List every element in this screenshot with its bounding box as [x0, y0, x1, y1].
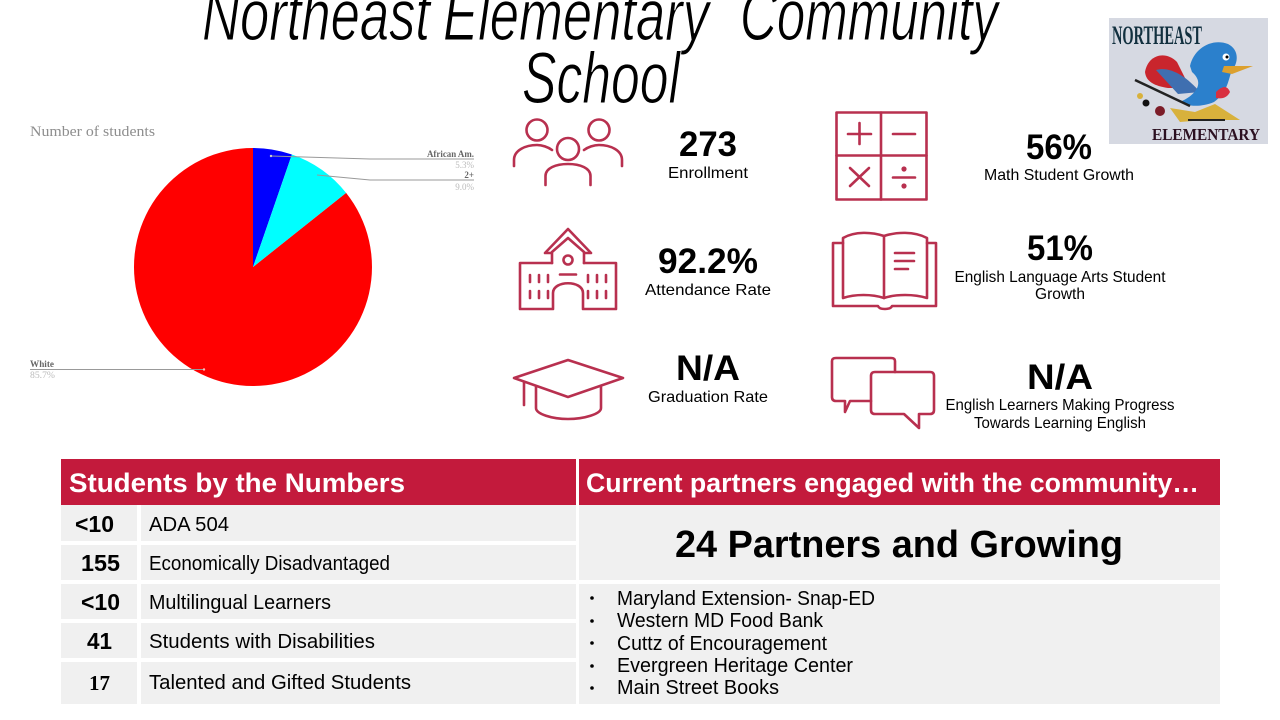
label: African Am. — [270, 149, 474, 170]
stat: English learners making progress: English Learners Making Progress — [946, 397, 1174, 414]
icon: school building — [520, 229, 616, 309]
pie slice: African Am. — [253, 148, 292, 267]
logo: Northeast Elementary roadrunner — [1109, 18, 1268, 144]
row: students with disabilities: 41 — [87, 628, 112, 654]
stat: attendance rate: Attendance Rate — [645, 282, 771, 299]
list: partners: Cuttz of Encouragement — [617, 633, 827, 655]
stat: enrollment: Enrollment — [668, 165, 749, 182]
panel: students by the numbers — [61, 459, 576, 704]
label: White — [30, 359, 205, 380]
stat: enrollment — [668, 125, 749, 182]
stat: attendance rate: 92.2% — [658, 242, 758, 281]
row: talented and gifted students: Talented and Gifted Students — [149, 672, 411, 694]
stat: enrollment: 273 — [679, 125, 737, 164]
row: ADA 504 — [61, 505, 576, 541]
stat: English language arts student growth — [954, 229, 1166, 303]
label: White: 85.7% — [30, 370, 56, 380]
heading: current partners — [579, 459, 1220, 505]
icon: graduation cap — [514, 360, 623, 419]
stat: English learners making progress — [946, 358, 1174, 432]
stat: English learners making progress: N/A — [1027, 358, 1093, 397]
stat: math student growth: 56% — [1026, 128, 1092, 167]
stat: graduation rate — [648, 349, 768, 406]
chart title: Number of students — [30, 124, 155, 140]
heading: current partners: Current partners engaged with the community… — [586, 468, 1199, 498]
list: partners: Western MD Food Bank — [617, 610, 824, 632]
heading: students by the numbers — [61, 459, 576, 505]
row: talented and gifted students — [61, 662, 576, 704]
stat: English language arts student growth: English Language Arts Student — [954, 269, 1166, 286]
icon: open book — [833, 233, 936, 309]
pie chart: number of students — [30, 124, 474, 386]
row: ADA 504: ADA 504 — [149, 514, 229, 536]
logo: Northeast Elementary roadrunner: ELEMENTARY — [1152, 125, 1260, 144]
stat: graduation rate: Graduation Rate — [648, 389, 768, 406]
label: White: White — [30, 359, 54, 369]
row: economically disadvantaged: 155 — [81, 550, 120, 576]
icon: speech bubbles — [832, 358, 934, 428]
stat: graduation rate: N/A — [676, 349, 740, 388]
list: partners: Maryland Extension- Snap-ED — [617, 588, 875, 610]
title — [202, 0, 1001, 119]
row: multilingual learners: <10 — [81, 589, 120, 615]
panel: current partners — [579, 459, 1220, 704]
icon: people — [514, 120, 622, 185]
label: African Am.: African Am. — [427, 149, 474, 159]
pie slice: 2+ — [253, 154, 346, 267]
logo: Northeast Elementary roadrunner: NORTHEAST — [1112, 21, 1202, 50]
stat: English learners making progress: Towards Learning English — [974, 415, 1146, 432]
label: African Am.: 5.3% — [455, 160, 474, 170]
list: partners: Main Street Books — [617, 677, 779, 699]
title: School — [522, 39, 681, 119]
list: partners — [579, 584, 1220, 704]
heading: students by the numbers: Students by the Numbers — [69, 468, 405, 498]
label: 2+: 9.0% — [455, 182, 474, 192]
list: partners: Evergreen Heritage Center — [617, 655, 853, 677]
stat: math student growth: Math Student Growth — [984, 167, 1134, 184]
icon: calculator operators — [836, 112, 926, 200]
row: economically disadvantaged: Economically Disadvantaged — [149, 553, 390, 575]
pie slice: White — [134, 148, 372, 386]
row: students with disabilities — [61, 623, 576, 658]
callout: 24 partners and growing: 24 Partners and Growing — [675, 524, 1123, 566]
stat: English language arts student growth: Growth — [1035, 286, 1085, 303]
row: multilingual learners: Multilingual Learners — [149, 592, 331, 614]
row: talented and gifted students: 17 — [89, 671, 110, 695]
label: 2+: 2+ — [464, 170, 474, 180]
stat: math student growth — [984, 128, 1134, 184]
stat: English language arts student growth: 51% — [1027, 229, 1093, 268]
callout: 24 partners and growing — [579, 505, 1220, 580]
row: multilingual learners — [61, 584, 576, 619]
row: economically disadvantaged — [61, 545, 576, 580]
row: students with disabilities: Students with Disabilities — [149, 631, 375, 653]
stat: attendance rate — [645, 242, 771, 299]
label: 2+ — [317, 170, 474, 192]
row: ADA 504: <10 — [75, 511, 114, 537]
